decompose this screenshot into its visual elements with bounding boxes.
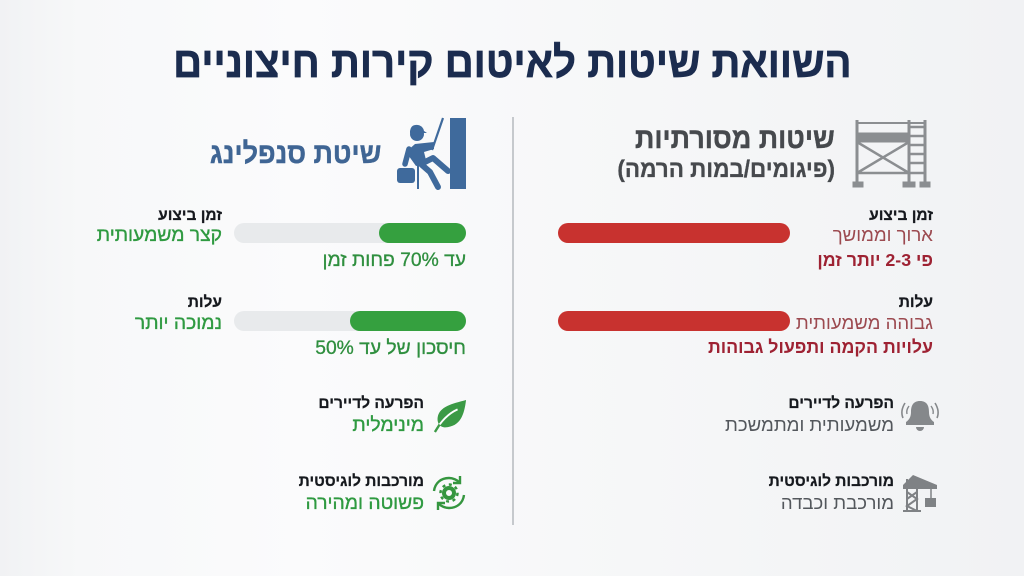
icon: scaffolding: [852, 120, 930, 188]
label: מורכבות לוגיסטית: [769, 473, 894, 490]
icon: bell: [901, 401, 939, 431]
bar track: [234, 311, 466, 331]
value: גבוהה משמעותית: [796, 312, 933, 333]
value: משמעותית ומתמשכת: [725, 414, 894, 435]
label: עלות: [188, 294, 222, 311]
icon: crane: [903, 475, 937, 512]
title: השוואת שיטות לאיטום קירות חיצוניים: [174, 39, 852, 87]
row: disturbance to residents: [725, 395, 939, 435]
bar fill: [350, 311, 466, 331]
red bar: [558, 223, 790, 243]
value: פשוטה ומהירה: [306, 493, 424, 514]
metric: cost: [135, 294, 466, 359]
label: מורכבות לוגיסטית: [299, 473, 424, 490]
value: ארוך וממושך: [833, 224, 933, 245]
row: disturbance to residents: [318, 395, 466, 436]
note: עלויות הקמה ותפעול גבוהות: [708, 337, 933, 357]
icon: leaf: [434, 400, 466, 433]
heading: rappelling method: שיטת סנפלינג: [210, 138, 381, 170]
center divider: [512, 117, 514, 525]
row: logistical complexity: [768, 473, 937, 513]
value: מורכבת וכבדה: [781, 492, 894, 513]
red bar: [558, 311, 790, 331]
progress bar: [234, 311, 466, 331]
panel: traditional methods: [558, 120, 939, 513]
label: עלות: [899, 294, 933, 311]
label: הפרעה לדיירים: [788, 395, 894, 412]
label: זמן ביצוע: [158, 207, 222, 224]
icon: gear with cycle arrows: [432, 476, 466, 510]
metric: cost: [558, 294, 933, 357]
subheading: scaffolding and lifts: (פיגומים/במות הרמה): [617, 156, 835, 183]
note: חיסכון של עד 50%: [315, 338, 466, 359]
note: עד 70% פחות זמן: [323, 250, 466, 271]
label: הפרעה לדיירים: [318, 395, 424, 412]
icon: rappelling worker: [397, 118, 466, 190]
metric: execution time: [558, 207, 933, 270]
label: זמן ביצוע: [869, 207, 933, 224]
value: מינימלית: [352, 415, 424, 436]
note: פי 2-3 יותר זמן: [817, 250, 933, 270]
heading: traditional methods: שיטות מסורתיות: [635, 123, 835, 155]
metric: execution time: [97, 207, 466, 271]
bar track: [234, 223, 466, 243]
value: קצר משמעותית: [97, 225, 222, 246]
bar fill: [379, 223, 466, 243]
progress bar: [234, 223, 466, 243]
panel: rappelling method: [97, 118, 466, 514]
row: logistical complexity: [298, 473, 466, 514]
value: נמוכה יותר: [135, 313, 222, 334]
